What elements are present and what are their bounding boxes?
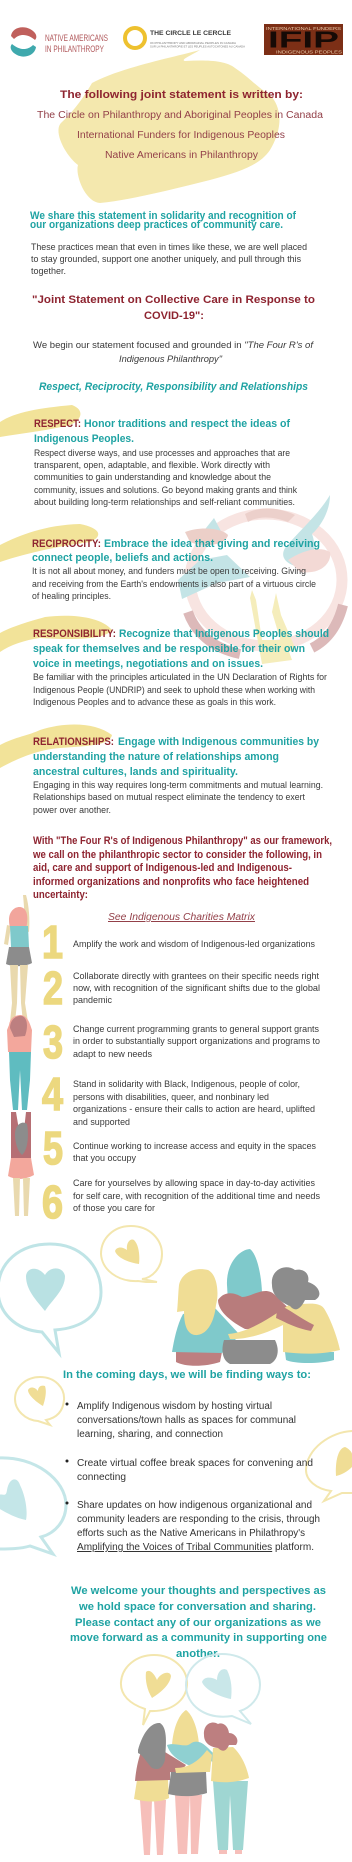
icon: large teal speech bubble bbox=[0, 1244, 101, 1353]
person: left bbox=[134, 1723, 186, 1855]
respect body: about building long-term relationships and self-reliant communities. bbox=[34, 497, 295, 507]
item 6: for self care, with recognition of the additional time and needs bbox=[73, 1191, 320, 1201]
call to the philanthropic sector: informed organizations and nonprofits who face heightened bbox=[33, 876, 309, 888]
four Rs intro: Indigenous Philanthropy" bbox=[119, 354, 223, 365]
reciprocity body: of healing principles. bbox=[32, 591, 111, 601]
respect heading: Honor traditions and respect the ideas of bbox=[84, 418, 290, 430]
responsibility body: Be familiar with the principles articulated in the UN Declaration of Rights for bbox=[33, 672, 327, 682]
respect body: community, issues and solutions. Go beyond making grants and think bbox=[34, 485, 297, 495]
four Rs intro bbox=[33, 340, 314, 365]
logo: Native Americans in Philanthropy: NATIVE AMERICANS bbox=[45, 33, 108, 43]
heading block: joint statement authors: The following joint statement is written by: bbox=[60, 89, 303, 101]
item 4: 4 bbox=[42, 1068, 63, 1120]
person: right bbox=[204, 1722, 249, 1854]
item 1: 1 bbox=[42, 916, 63, 968]
item 3: Change current programming grants to general support grants bbox=[73, 1024, 319, 1034]
item 5: 5 bbox=[43, 1122, 63, 1174]
logo: Native Americans in Philanthropy: IN PHILANTHROPY bbox=[45, 44, 104, 54]
respect body: Respect diverse ways, and use processes and approaches that are bbox=[34, 448, 290, 458]
community care paragraph bbox=[31, 242, 307, 276]
icon: yellow speech bubble top bbox=[101, 1226, 162, 1282]
bullet 3: efforts such as the Native Americans in Philathropy's bbox=[77, 1528, 305, 1539]
item 6 bbox=[42, 1176, 320, 1228]
collective care title: "Joint Statement on Collective Care in Response to bbox=[32, 294, 315, 306]
panel: respect bbox=[0, 405, 297, 507]
brush: reciprocity bbox=[0, 524, 98, 562]
closing invitation: We welcome your thoughts and perspectives as bbox=[71, 1585, 326, 1597]
bullet 3 bbox=[66, 1500, 320, 1553]
closing invitation bbox=[70, 1585, 327, 1660]
item 5: Continue working to increase access and equity in the spaces bbox=[73, 1141, 316, 1151]
logo row bbox=[11, 24, 343, 57]
bullet list bbox=[66, 1401, 320, 1553]
item 5 bbox=[43, 1122, 316, 1174]
item 4: Stand in solidarity with Black, Indigenous, people of color, bbox=[73, 1079, 300, 1089]
relationships heading: Engage with Indigenous communities by bbox=[118, 736, 320, 748]
brush: relationships bbox=[0, 725, 112, 768]
collective care title bbox=[32, 294, 315, 322]
icon: bottom speech bubbles bbox=[121, 1654, 260, 1725]
respect heading: Indigenous Peoples. bbox=[34, 433, 134, 445]
logo: IFIP: IFIP bbox=[268, 26, 339, 52]
closing invitation: Please contact any of our organizations as we bbox=[75, 1617, 321, 1629]
item 2: pandemic bbox=[73, 995, 112, 1005]
solidarity statement heading bbox=[30, 210, 296, 231]
solidarity statement heading: We share this statement in solidarity and recognition of bbox=[30, 210, 296, 222]
relationships body: Relationships based on mutual respect eliminate the tendency to exert bbox=[33, 792, 305, 802]
relationships body bbox=[33, 780, 323, 815]
decorative circle wheel illustration bbox=[178, 495, 343, 664]
reciprocity heading: connect people, beliefs and actions. bbox=[32, 552, 213, 564]
community care paragraph: together. bbox=[31, 266, 66, 276]
item 3: adapt to new needs bbox=[73, 1049, 152, 1059]
item 1 bbox=[42, 916, 315, 968]
call to the philanthropic sector bbox=[32, 835, 332, 901]
friend: middle bbox=[218, 1249, 314, 1364]
heading block: joint statement authors: The Circle on Philanthropy and Aboriginal Peoples in Canada bbox=[37, 110, 323, 121]
reciprocity body: It is not all about money, and funders must be open to receiving. Giving bbox=[32, 566, 306, 576]
logo: The Circle: THE CIRCLE LE CERCLE bbox=[150, 30, 232, 37]
relationships heading: ancestral cultures, lands and spirituality. bbox=[33, 766, 238, 778]
reciprocity heading: Embrace the idea that giving and receiving bbox=[104, 538, 320, 550]
heading block: joint statement authors: Native Americans in Philanthropy bbox=[105, 150, 258, 161]
bullet 2 bbox=[66, 1458, 313, 1483]
relationships heading bbox=[33, 736, 320, 778]
community care paragraph: to stay grounded, support one another uniquely, and pull through this bbox=[31, 254, 301, 264]
reciprocity body bbox=[32, 566, 316, 601]
bullet 1: Amplify Indigenous wisdom by hosting virtual bbox=[77, 1401, 272, 1412]
responsibility body: Indigenous People (UNDRIP) and seek to uphold these when working with bbox=[33, 685, 315, 695]
item 4 bbox=[42, 1068, 315, 1127]
four Rs intro: We begin our statement focused and grounded in "The Four R's of bbox=[33, 340, 314, 351]
item 2: 2 bbox=[43, 962, 63, 1014]
icon: yellow speech bubble right bbox=[306, 1431, 352, 1501]
respect heading: RESPECT: bbox=[34, 418, 81, 430]
item 4: organizations - ensure their calls to action are heard, uplifted bbox=[73, 1104, 315, 1114]
person: middle bbox=[167, 1710, 232, 1854]
yellow brush: intro bbox=[58, 50, 279, 203]
reciprocity heading bbox=[32, 538, 320, 564]
illustration: three friends embracing bbox=[172, 1249, 340, 1366]
bullet 2: connecting bbox=[77, 1472, 126, 1483]
item 3: 3 bbox=[43, 1016, 63, 1068]
item 5: that you occupy bbox=[73, 1153, 136, 1163]
collective care title: COVID-19": bbox=[144, 310, 204, 322]
responsibility heading: Recognize that Indigenous Peoples should bbox=[119, 628, 329, 640]
panel: relationships bbox=[0, 725, 323, 815]
respect body: transparent, open, adaptable, and flexible. Work directly with bbox=[34, 460, 270, 470]
bullet 3: Share updates on how indigenous organizational and bbox=[77, 1500, 312, 1511]
responsibility body bbox=[33, 672, 327, 707]
responsibility heading bbox=[33, 628, 329, 670]
item 6: Care for yourselves by allowing space in day-to-day activities bbox=[73, 1178, 315, 1188]
logo: IFIP: INTERNATIONAL FUNDERS bbox=[266, 26, 341, 32]
bullet 1 bbox=[66, 1401, 296, 1440]
brush: responsibility bbox=[0, 616, 112, 652]
responsibility heading: voice in meetings, negotiations and on issues. bbox=[33, 658, 263, 670]
closing invitation: move forward as a community in supporting one bbox=[70, 1632, 327, 1644]
relationships body: Engaging in this way requires long-term commitments and mutual learning. bbox=[33, 780, 323, 790]
responsibility heading: RESPONSIBILITY: bbox=[33, 628, 116, 640]
item 2: Collaborate directly with grantees on their specific needs right bbox=[73, 971, 319, 981]
item 4: and supported bbox=[73, 1117, 130, 1127]
relationships heading: RELATIONSHIPS: bbox=[33, 736, 114, 748]
respect body bbox=[34, 448, 297, 507]
item 6: 6 bbox=[42, 1176, 63, 1228]
item 2 bbox=[43, 962, 320, 1014]
call to the philanthropic sector: uncertainty: bbox=[33, 889, 88, 901]
responsibility heading: speak for themselves and be responsible for their own bbox=[33, 643, 305, 655]
link: Indigenous Charities Matrix: See Indigenous Charities Matrix bbox=[108, 912, 256, 923]
bullet 3: Amplifying the Voices of Tribal Communities platform. bbox=[77, 1542, 314, 1553]
call to the philanthropic sector: aid, care and support of Indigenous-led and Indigenous- bbox=[33, 862, 292, 874]
relationships heading: understanding the nature of relationships among bbox=[33, 751, 279, 763]
logo: IFIP bbox=[264, 24, 343, 56]
bullet 3: community leaders are responding to the crisis, through bbox=[77, 1514, 320, 1525]
item 1: Amplify the work and wisdom of Indigenous-led organizations bbox=[73, 939, 315, 949]
coming days heading: In the coming days, we will be finding ways to: bbox=[63, 1369, 311, 1381]
friend: left bbox=[172, 1269, 240, 1366]
bullet 1: conversations/town halls as spaces for communal bbox=[77, 1415, 296, 1426]
icon: teal speech bubble left bbox=[0, 1458, 66, 1554]
solidarity statement heading: our organizations deep practices of community care. bbox=[30, 219, 283, 231]
panel: reciprocity bbox=[0, 524, 320, 601]
logo: The Circle: ON PHILANTHROPY AND ABORIGINAL PEOPLES IN CANADA bbox=[150, 42, 236, 45]
closing invitation: another. bbox=[176, 1648, 220, 1660]
item 2: now, with recognition of the significant shifts due to the global bbox=[73, 983, 320, 993]
logo: The Circle: SUR LA PHILANTHROPIE ET LES PEUPLES AUTOCHTONES AU CANADA bbox=[150, 46, 245, 48]
bullet 2: Create virtual coffee break spaces for convening and bbox=[77, 1458, 313, 1469]
brush: respect bbox=[0, 405, 80, 437]
illustration: three friends standing bbox=[134, 1710, 249, 1855]
bullet 1: learning, sharing, and connection bbox=[77, 1429, 223, 1440]
community care paragraph: These practices mean that even in times like these, we are well placed bbox=[31, 242, 307, 252]
reciprocity heading: RECIPROCITY: bbox=[32, 538, 101, 550]
reciprocity body: and receiving from the Earth's endowments is also part of a virtuous circle bbox=[32, 579, 316, 589]
heading block: joint statement authors: International Funders for Indigenous Peoples bbox=[77, 130, 285, 141]
relationships body: power over another. bbox=[33, 805, 111, 815]
item 3 bbox=[43, 1016, 320, 1068]
friend: right bbox=[228, 1267, 340, 1363]
panel: responsibility bbox=[0, 616, 329, 707]
item 4: persons with disabilities, queer, and nonbinary led bbox=[73, 1092, 269, 1102]
logo: The Circle bbox=[125, 28, 245, 48]
responsibility body: Indigenous Peoples and to advance these as goals in this work. bbox=[33, 697, 276, 707]
numbered list bbox=[42, 916, 320, 1228]
respect body: communities to gain understanding and knowledge about the bbox=[34, 472, 271, 482]
item 3: in order to substantially support organizations and programs to bbox=[73, 1036, 320, 1046]
logo: Native Americans in Philanthropy bbox=[11, 27, 108, 57]
icon: yellow speech bubble left bbox=[15, 1377, 64, 1425]
four Rs subtitle: Respect, Reciprocity, Responsibility and Relationships bbox=[39, 381, 308, 393]
illustration: stacked people totem bbox=[4, 895, 34, 1216]
respect heading bbox=[34, 418, 290, 445]
heading block: joint statement authors bbox=[37, 89, 323, 161]
closing invitation: we hold space for conversation and sharing. bbox=[78, 1601, 316, 1613]
item 6: of those you care for bbox=[73, 1203, 155, 1213]
logo: IFIP: INDIGENOUS PEOPLES bbox=[276, 50, 342, 56]
